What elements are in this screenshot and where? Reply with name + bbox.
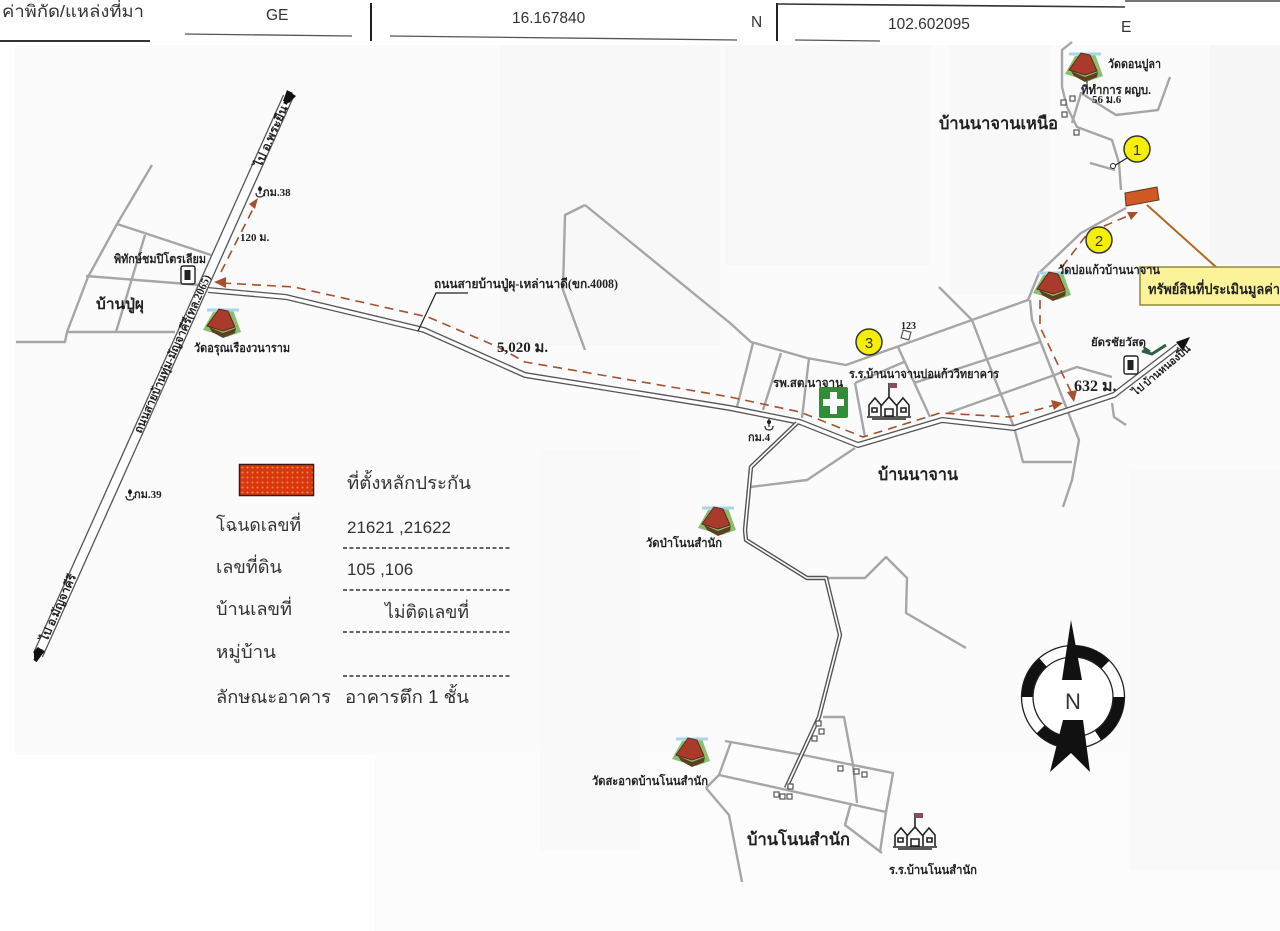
icon: north arrow compass	[1022, 620, 1124, 772]
icon: temple Wat Pa Non Samnak	[698, 507, 736, 536]
road: north-south highway	[34, 90, 296, 661]
marker 1: 1	[1133, 142, 1141, 159]
icon: temple Wat Sa-at	[672, 738, 710, 767]
legend: บ้านเลขที่	[216, 596, 292, 619]
icon: temple Wat Don Pula	[1065, 53, 1103, 82]
legend: ลักษณะอาคาร	[216, 687, 331, 707]
decorative thumbnail near Chai Wasadu	[1142, 345, 1166, 354]
map labels: ถนนสายบ้านปู่ผุ-เหล่านาดี(ขก.4008)	[434, 277, 618, 292]
icon: hospital green cross	[819, 387, 848, 418]
marker 3: 3	[865, 335, 873, 352]
marker 3	[856, 329, 882, 355]
route: dashed access path with arrows	[214, 198, 1138, 437]
map labels: บ้านปู่ผุ	[96, 296, 144, 314]
icon: temple Wat Bo Kaeo	[1033, 272, 1071, 301]
road: south to Ban Non Samnak	[745, 423, 840, 788]
legend: ที่ตั้งหลักประกัน	[347, 470, 471, 493]
map labels: ไป อ.มัญจาคีรี	[36, 571, 79, 645]
icon: school Bo Kaeo	[867, 383, 911, 419]
map labels: ไป บ้านหนองปิ่น	[1128, 340, 1194, 399]
header: coordinates row: 16.167840	[512, 10, 586, 27]
map labels: ร.ร.บ้านโนนสำนัก	[889, 862, 977, 877]
map labels: วัดดอนปูลา	[1108, 57, 1161, 72]
legend: ไม่ติดเลขที่	[383, 599, 469, 622]
marker 1	[1110, 136, 1150, 168]
legend: หมู่บ้าน	[216, 642, 276, 663]
legend: โฉนดเลขที่	[216, 512, 301, 535]
map labels: 56 ม.6	[1092, 94, 1122, 106]
header: coordinates row: ค่าพิกัด/แหล่งที่มา	[2, 0, 144, 21]
map labels: บ้านนาจาน	[878, 465, 958, 484]
map labels: กม.39	[134, 489, 162, 501]
map labels: วัดป่าโนนสำนัก	[646, 535, 722, 550]
legend: อาคารตึก 1 ชั้น	[345, 684, 469, 707]
map labels: วัดอรุณเรืองวนาราม	[194, 341, 290, 356]
map labels: 120 ม.	[240, 232, 270, 244]
icon: school Non Samnak	[893, 813, 937, 849]
map labels: วัดบ่อแก้วบ้านนาจาน	[1058, 263, 1161, 277]
map labels: กม.4	[748, 432, 771, 444]
map labels	[36, 57, 1194, 877]
map labels: พิทักษ์ชมปิโตรเลียม	[114, 251, 206, 266]
map labels: ที่ทำการ ผญบ.	[1081, 81, 1151, 97]
legend: เลขที่ดิน	[216, 554, 282, 577]
map labels: รพ.สต.นาจาน	[773, 376, 844, 390]
legend	[216, 464, 511, 707]
map labels: 5,020 ม.	[497, 340, 548, 356]
map labels: 123	[901, 321, 916, 332]
header: coordinates row: E	[1121, 19, 1131, 36]
map labels: ไป อ.พระยืน	[250, 103, 291, 171]
icon: km markers	[126, 186, 773, 500]
header: coordinates row: GE	[266, 7, 288, 24]
map labels: ยัดรชัยวัสดุ	[1091, 336, 1146, 350]
callout: appraised property	[1140, 267, 1280, 305]
map labels: วัดสะอาดบ้านโนนสำนัก	[592, 773, 708, 788]
icon: north arrow compass: N	[1065, 689, 1081, 714]
road: Ban Pa Pu to Ban Na Chan	[208, 290, 1190, 445]
map labels: กม.38	[263, 187, 291, 199]
map labels: บ้านโนนสำนัก	[747, 829, 850, 849]
target property marker and leader line	[1125, 187, 1216, 267]
legend: 21621 ,21622	[347, 518, 451, 537]
icon: temple Wat Runruang	[203, 309, 241, 338]
icon: fuel station west	[181, 266, 195, 284]
icon: fuel station east	[1124, 356, 1138, 374]
marker 2: 2	[1095, 233, 1103, 250]
legend: 105 ,106	[347, 560, 413, 579]
small building markers	[774, 96, 1079, 799]
map labels: 632 ม.	[1074, 378, 1117, 395]
header: coordinates row	[0, 0, 1280, 41]
marker 2	[1086, 227, 1112, 253]
map labels: ร.ร.บ้านนาจานบ่อแก้ววิทยาคาร	[849, 367, 999, 381]
map labels: บ้านนาจานเหนือ	[939, 113, 1058, 133]
legend swatch: collateral location	[240, 464, 314, 496]
header: coordinates row: N	[751, 14, 762, 31]
header: coordinates row: 102.602095	[888, 16, 970, 33]
map labels: ถนนสายบ้านทุ่ม-มัญจาคีรี(ทล.2065)	[132, 273, 215, 436]
